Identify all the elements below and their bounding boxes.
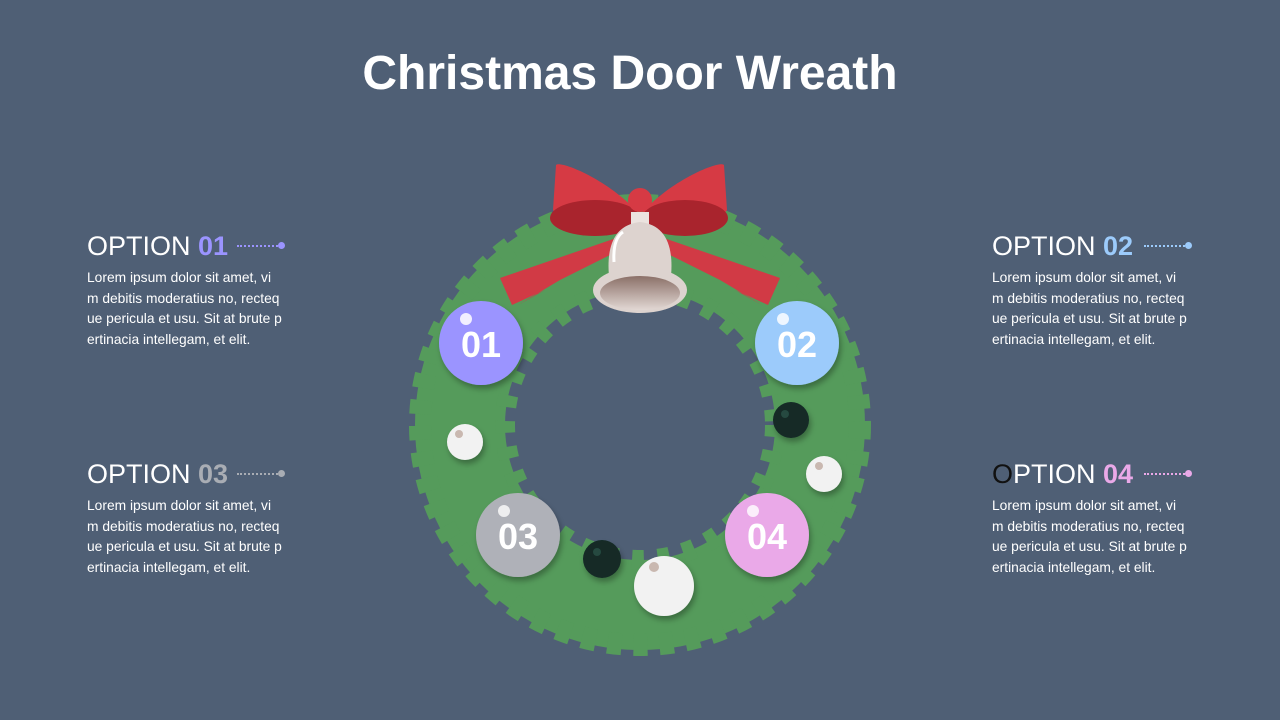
option 01 text: m debitis moderatius no, recteq (87, 290, 279, 306)
option 01 text: ue pericula et usu. Sit at brute p (87, 311, 282, 326)
option 02 text: m debitis moderatius no, recteq (992, 290, 1184, 306)
option 01 text: Lorem ipsum dolor sit amet, vi (87, 270, 271, 285)
option 03 text: Lorem ipsum dolor sit amet, vi (87, 498, 271, 513)
option 03 text: ertinacia intellegam, et elit. (87, 560, 250, 574)
option 02 text: ertinacia intellegam, et elit. (992, 332, 1155, 346)
option 03 text: ue pericula et usu. Sit at brute p (87, 539, 282, 554)
option 01 text: ertinacia intellegam, et elit. (87, 332, 250, 346)
title: Christmas Door Wreath (362, 47, 898, 100)
option 04 text: ertinacia intellegam, et elit. (992, 560, 1155, 574)
option 03 text: m debitis moderatius no, recteq (87, 518, 279, 534)
option 01 text (87, 231, 285, 347)
wreath ring (420, 205, 860, 645)
number badges: 04 (747, 516, 787, 557)
red bow (500, 164, 780, 305)
option 03 text (87, 459, 285, 575)
option 04 text: ue pericula et usu. Sit at brute p (992, 539, 1187, 554)
number badges (439, 301, 839, 577)
option 04 text: m debitis moderatius no, recteq (992, 518, 1184, 534)
number badges: 03 (498, 516, 538, 557)
option 02 text: Lorem ipsum dolor sit amet, vi (992, 270, 1176, 285)
option 02 text: ue pericula et usu. Sit at brute p (992, 311, 1187, 326)
option 02 text: OPTION 02 (992, 231, 1133, 261)
option 04 text: Lorem ipsum dolor sit amet, vi (992, 498, 1176, 513)
option 04 text (992, 459, 1192, 575)
number badges: 01 (461, 324, 501, 365)
ornaments (447, 402, 842, 616)
number badges: 02 (777, 324, 817, 365)
option 03 text: OPTION 03 (87, 459, 228, 489)
option 04 text: OPTION 04 (992, 459, 1133, 489)
option 01 text: OPTION 01 (87, 231, 228, 261)
option 02 text (992, 231, 1192, 347)
bell (593, 212, 687, 313)
